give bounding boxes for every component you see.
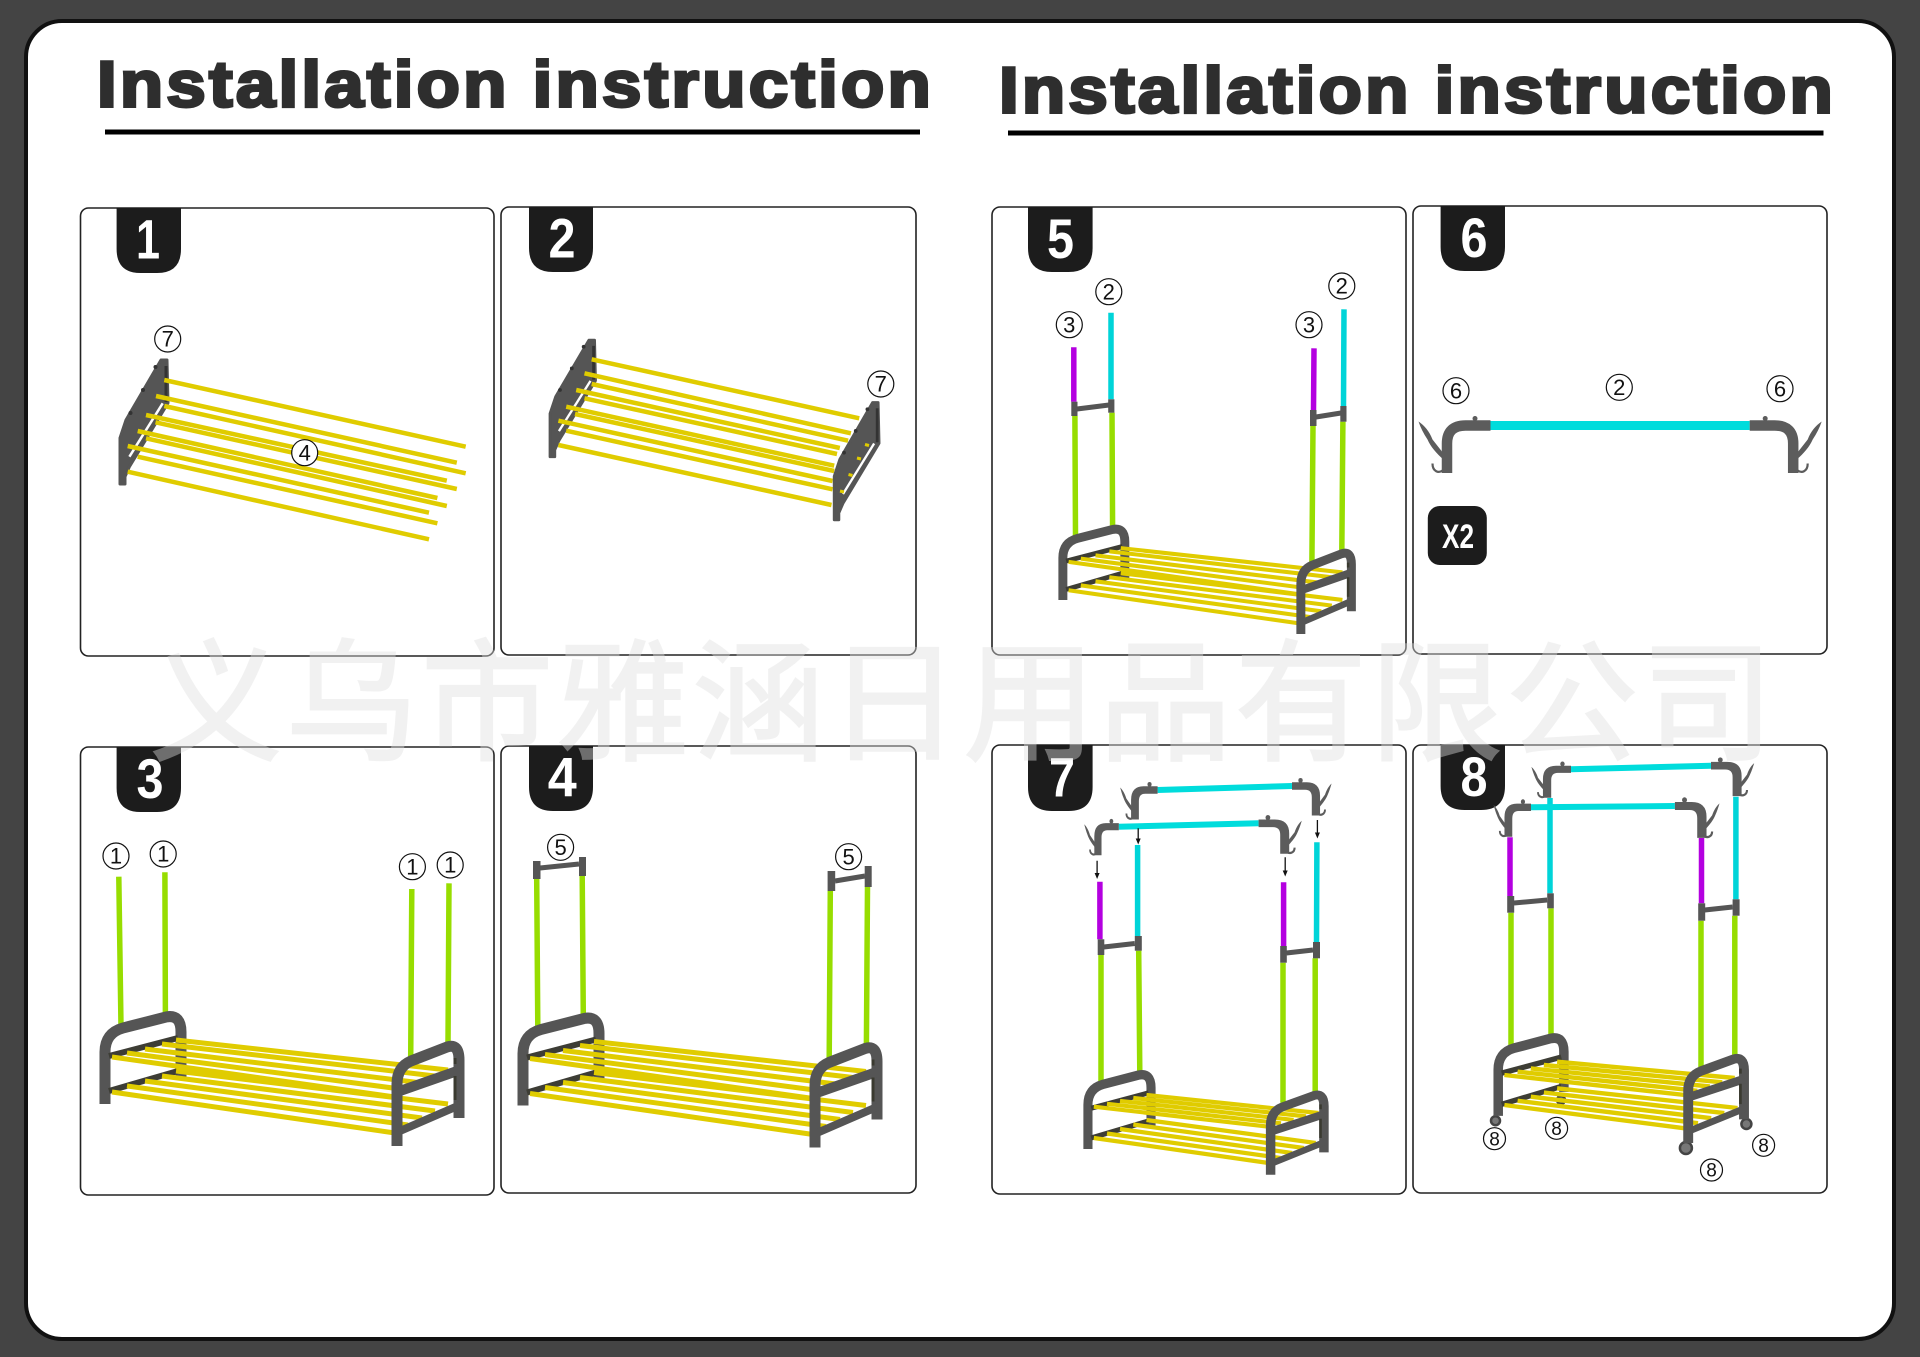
- part label 7: [155, 326, 181, 352]
- panel: step 7: [992, 745, 1406, 1194]
- part labels: 2: [1613, 375, 1625, 400]
- left hook: [1418, 416, 1490, 473]
- green posts: [537, 875, 868, 1059]
- quantity badge x2: X2: [1442, 518, 1474, 556]
- cyan rail: [1490, 421, 1750, 430]
- top rail rear: [1120, 778, 1332, 819]
- step badge 8: 8: [1460, 745, 1488, 808]
- part labels 1: 1: [110, 844, 122, 869]
- shoe rack base: [1498, 1038, 1745, 1143]
- part label 7: 7: [162, 327, 174, 352]
- part labels: 2: [1336, 274, 1348, 299]
- part label 7: 7: [875, 372, 887, 397]
- step badge 5: 5: [1047, 207, 1074, 270]
- step badge 2: 2: [548, 207, 576, 270]
- part labels 5: 5: [554, 835, 567, 860]
- step badge 3: 3: [136, 747, 164, 810]
- right hook: [1750, 416, 1822, 473]
- shoe rack base: [1088, 1075, 1325, 1175]
- shelf rods: [128, 380, 466, 539]
- part labels 8: 8: [1758, 1136, 1769, 1157]
- panel: step 6: [1413, 206, 1827, 654]
- panel: step 1: [80, 207, 494, 656]
- part labels: 3: [1303, 312, 1315, 337]
- connectors: [533, 857, 872, 891]
- step badge 7: 7: [1049, 746, 1075, 809]
- posts: [1510, 797, 1736, 1067]
- step badge 2: [529, 207, 593, 272]
- rod ends behind frame: [840, 444, 869, 492]
- connectors: [1098, 936, 1320, 963]
- panel: step 4: [501, 746, 916, 1193]
- step badge 1: [117, 207, 181, 273]
- part labels 8: 8: [1551, 1119, 1562, 1140]
- step badge 6: [1441, 206, 1505, 271]
- posts: [1100, 842, 1317, 1103]
- part labels 1: 1: [406, 854, 419, 879]
- part labels 1: 1: [444, 853, 456, 878]
- panel: step 3: [80, 747, 494, 1195]
- step badge 1: 1: [136, 207, 160, 270]
- casters: [1491, 1096, 1751, 1154]
- part labels 8: 8: [1489, 1130, 1500, 1150]
- part labels 1: 1: [157, 842, 169, 867]
- part labels 5: 5: [842, 844, 855, 869]
- step badge 4: [529, 746, 593, 811]
- arrows: [1095, 820, 1320, 879]
- part labels: 2: [1103, 279, 1115, 304]
- step badge 8: [1441, 745, 1505, 810]
- part labels: [1443, 374, 1793, 404]
- posts: [1074, 309, 1344, 563]
- step badge 5: [1028, 207, 1093, 272]
- part label 4: [292, 440, 318, 466]
- step badge 7: [1028, 745, 1093, 811]
- part labels: 3: [1063, 312, 1075, 337]
- connectors: [1507, 893, 1740, 921]
- step badge 4: 4: [548, 746, 577, 809]
- panel: step 2: [501, 207, 916, 655]
- green posts: [119, 872, 449, 1058]
- step badge 3: [117, 747, 181, 812]
- part labels 1: [103, 841, 463, 880]
- watermark: 义乌市雅涵日用品有限公司: [150, 631, 1777, 778]
- part label 4: 4: [299, 440, 311, 465]
- panel: step 8: [1413, 745, 1827, 1193]
- part labels 8: [1484, 1117, 1775, 1182]
- part labels: 6: [1450, 378, 1462, 403]
- top rail rear: [1531, 757, 1754, 798]
- shoe rack base: [105, 1017, 460, 1146]
- panel: step 5: [992, 207, 1406, 655]
- heading: right: Installation instruction: [999, 54, 1833, 127]
- shoe rack base: [523, 1018, 878, 1148]
- end frame: [120, 360, 168, 484]
- heading: left: Installation instruction: [97, 48, 931, 121]
- part labels 8: 8: [1706, 1161, 1717, 1182]
- part labels: 6: [1774, 376, 1786, 401]
- top rail front: [1084, 815, 1302, 855]
- quantity badge x2: [1428, 506, 1487, 565]
- part labels: [1056, 273, 1355, 338]
- right end frame: [834, 403, 879, 520]
- shelf rods: [558, 359, 859, 505]
- part label 7: [868, 371, 894, 397]
- connectors: [1071, 399, 1346, 426]
- top rail front: [1494, 797, 1720, 838]
- part labels 5: [548, 834, 862, 870]
- step badge 6: 6: [1460, 206, 1488, 269]
- shoe rack base: [1063, 529, 1352, 634]
- left end frame: [550, 340, 595, 457]
